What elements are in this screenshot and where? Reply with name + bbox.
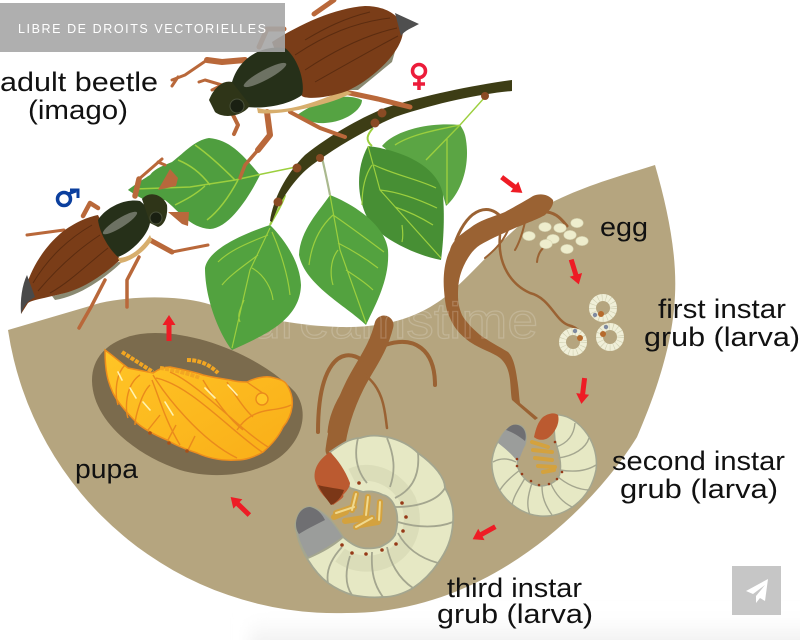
label: first instar grub: first instar bbox=[658, 294, 786, 324]
pronotum highlight bbox=[241, 59, 289, 91]
pupa antennae bbox=[122, 352, 218, 378]
arrow: pupa to adult bbox=[162, 315, 176, 341]
grub 3 bbox=[600, 325, 620, 348]
arrow: first to second instar bbox=[575, 377, 591, 405]
pupa segment and wing lines bbox=[116, 365, 291, 458]
leaf: right bbox=[359, 128, 444, 260]
grub inner shading bbox=[340, 473, 412, 564]
elytra bbox=[21, 215, 120, 314]
eye bbox=[150, 212, 162, 224]
head bbox=[142, 194, 167, 227]
abdomen edge bbox=[52, 262, 122, 300]
wing tip bbox=[395, 13, 419, 36]
elytra ridges bbox=[33, 225, 108, 293]
underbody bbox=[118, 235, 152, 263]
leaf: bottom left bbox=[205, 195, 301, 350]
pronotum bbox=[98, 200, 150, 257]
label: third instar grub: third instar bbox=[447, 573, 582, 603]
icon: paper plane bbox=[746, 579, 768, 603]
arrow: leaf to egg bbox=[498, 172, 526, 198]
birch branch with leaves bbox=[128, 80, 512, 350]
label: third instar grub bbox=[437, 573, 593, 629]
small leaf behind beetle bbox=[296, 97, 362, 123]
grub head bbox=[534, 413, 559, 440]
tail tip bbox=[506, 425, 526, 441]
tail tip bbox=[296, 507, 325, 534]
pupa bbox=[92, 333, 303, 475]
tail bbox=[498, 425, 526, 462]
leaf: left, eaten bbox=[128, 138, 296, 229]
spiracles bbox=[340, 481, 408, 556]
root system: left bbox=[318, 325, 435, 450]
elytra bbox=[272, 6, 403, 98]
pupa highlights bbox=[118, 372, 237, 415]
bottom shadow band bbox=[250, 618, 800, 640]
grub head bbox=[315, 452, 350, 505]
root branches bbox=[456, 210, 582, 338]
arrow: second to third instar bbox=[469, 521, 499, 545]
female symbol bbox=[412, 64, 426, 90]
antenna fans bbox=[158, 169, 189, 226]
watermark: dreamstime bbox=[250, 293, 538, 349]
grub 2 bbox=[562, 329, 584, 352]
grub mandible bbox=[318, 485, 344, 505]
grub legs bbox=[334, 494, 380, 527]
label: imago: (imago) bbox=[28, 95, 128, 125]
stock banner bbox=[0, 3, 285, 52]
abdomen edge bbox=[345, 48, 396, 90]
second instar grub bbox=[492, 413, 596, 516]
underbody bbox=[257, 90, 352, 113]
segment lines bbox=[493, 423, 596, 515]
legs bbox=[172, 0, 410, 178]
pupa eye bbox=[256, 393, 268, 405]
pupa spiracles bbox=[148, 431, 189, 453]
label: egg: egg bbox=[600, 212, 648, 242]
grub leg highlights bbox=[336, 494, 380, 527]
label: first instar grub bbox=[644, 294, 800, 352]
leaf: centre bbox=[299, 158, 388, 325]
grub body bbox=[492, 415, 596, 516]
eye bbox=[230, 99, 244, 113]
leaf: rear right bbox=[382, 97, 485, 206]
share button bbox=[732, 566, 781, 615]
label: first instar grub: grub (larva) bbox=[644, 322, 800, 352]
tail bbox=[296, 507, 343, 558]
main root bbox=[444, 194, 553, 420]
pupa body bbox=[105, 350, 292, 460]
third instar grub bbox=[295, 436, 453, 597]
grub body bbox=[295, 436, 453, 597]
soil cross-section bbox=[8, 165, 675, 613]
arrow: egg to first instar bbox=[565, 258, 585, 286]
pronotum highlight bbox=[101, 209, 139, 237]
branch bbox=[270, 80, 512, 222]
pupal cavity bbox=[92, 333, 303, 475]
label: third instar grub: grub (larva) bbox=[437, 599, 593, 629]
segment lines bbox=[308, 438, 453, 597]
spiracles bbox=[516, 441, 563, 486]
female beetle bbox=[172, 0, 419, 178]
root system: right bbox=[444, 194, 582, 420]
grub legs bbox=[532, 442, 555, 472]
male beetle bbox=[21, 159, 208, 328]
label: pupa: pupa bbox=[75, 454, 139, 484]
wing tip bbox=[21, 275, 35, 314]
first instar grubs bbox=[562, 298, 620, 352]
arrow: third instar to pupa bbox=[226, 492, 254, 520]
label: adult beetle: adult beetle bbox=[0, 67, 158, 97]
label: second instar grub bbox=[612, 446, 785, 504]
label: second instar grub: second instar bbox=[612, 446, 785, 476]
legs and antennae bbox=[27, 159, 208, 328]
head bbox=[209, 82, 250, 116]
male symbol bbox=[58, 190, 78, 206]
eggs bbox=[523, 218, 588, 254]
label: second instar grub: grub (larva) bbox=[620, 474, 778, 504]
pronotum bbox=[232, 47, 303, 108]
branch buds bbox=[274, 92, 489, 206]
grub 1 bbox=[592, 298, 614, 318]
stock banner: LIBRE DE DROITS VECTORIELLES bbox=[18, 22, 266, 36]
elytra ridges bbox=[295, 12, 398, 82]
